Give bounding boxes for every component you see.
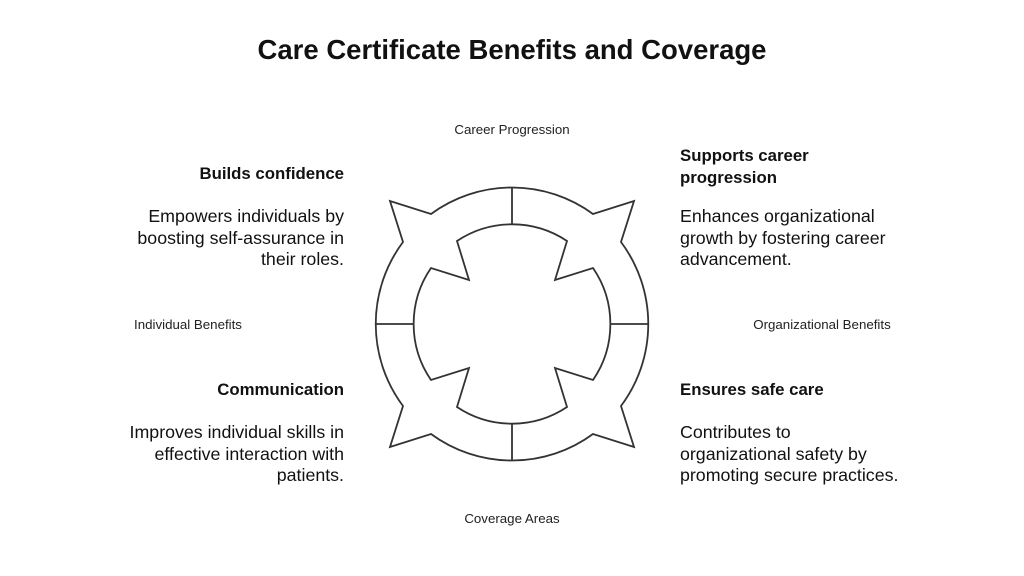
text block: builds confidence: boosting self-assurance in [137,228,344,248]
text block: builds confidence: their roles. [261,249,344,269]
text block: ensures safe care: Ensures safe care [680,380,824,399]
text block: builds confidence [137,164,344,269]
text block: communication: Communication [217,380,344,399]
text block: ensures safe care [680,380,898,485]
text block: supports career progression: Enhances organizational [680,206,875,226]
text block: supports career progression: Supports career [680,146,809,165]
cycle diagram [375,187,649,461]
text block: communication [130,380,344,485]
text block: supports career progression: progression [680,168,777,187]
text block: communication: patients. [277,465,344,485]
axis label: coverage areas: Coverage Areas [464,511,560,526]
axis label: organizational benefits: Organizational Benefits [753,317,891,332]
text block: supports career progression [680,146,886,269]
text block: ensures safe care: Contributes to [680,422,791,442]
text block: supports career progression: advancement. [680,249,792,269]
text block: communication: effective interaction with [155,444,344,464]
text block: builds confidence: Builds confidence [199,164,344,183]
title: Care Certificate Benefits and Coverage [258,34,766,65]
axis label: individual benefits: Individual Benefits [134,317,242,332]
text block: builds confidence: Empowers individuals by [148,206,344,226]
text block: communication: Improves individual skills in [130,422,344,442]
axis label: career progression: Career Progression [454,122,570,137]
text block: ensures safe care: organizational safety by [680,444,867,464]
text block: ensures safe care: promoting secure practices. [680,465,898,485]
text block: supports career progression: growth by fostering career [680,228,886,248]
